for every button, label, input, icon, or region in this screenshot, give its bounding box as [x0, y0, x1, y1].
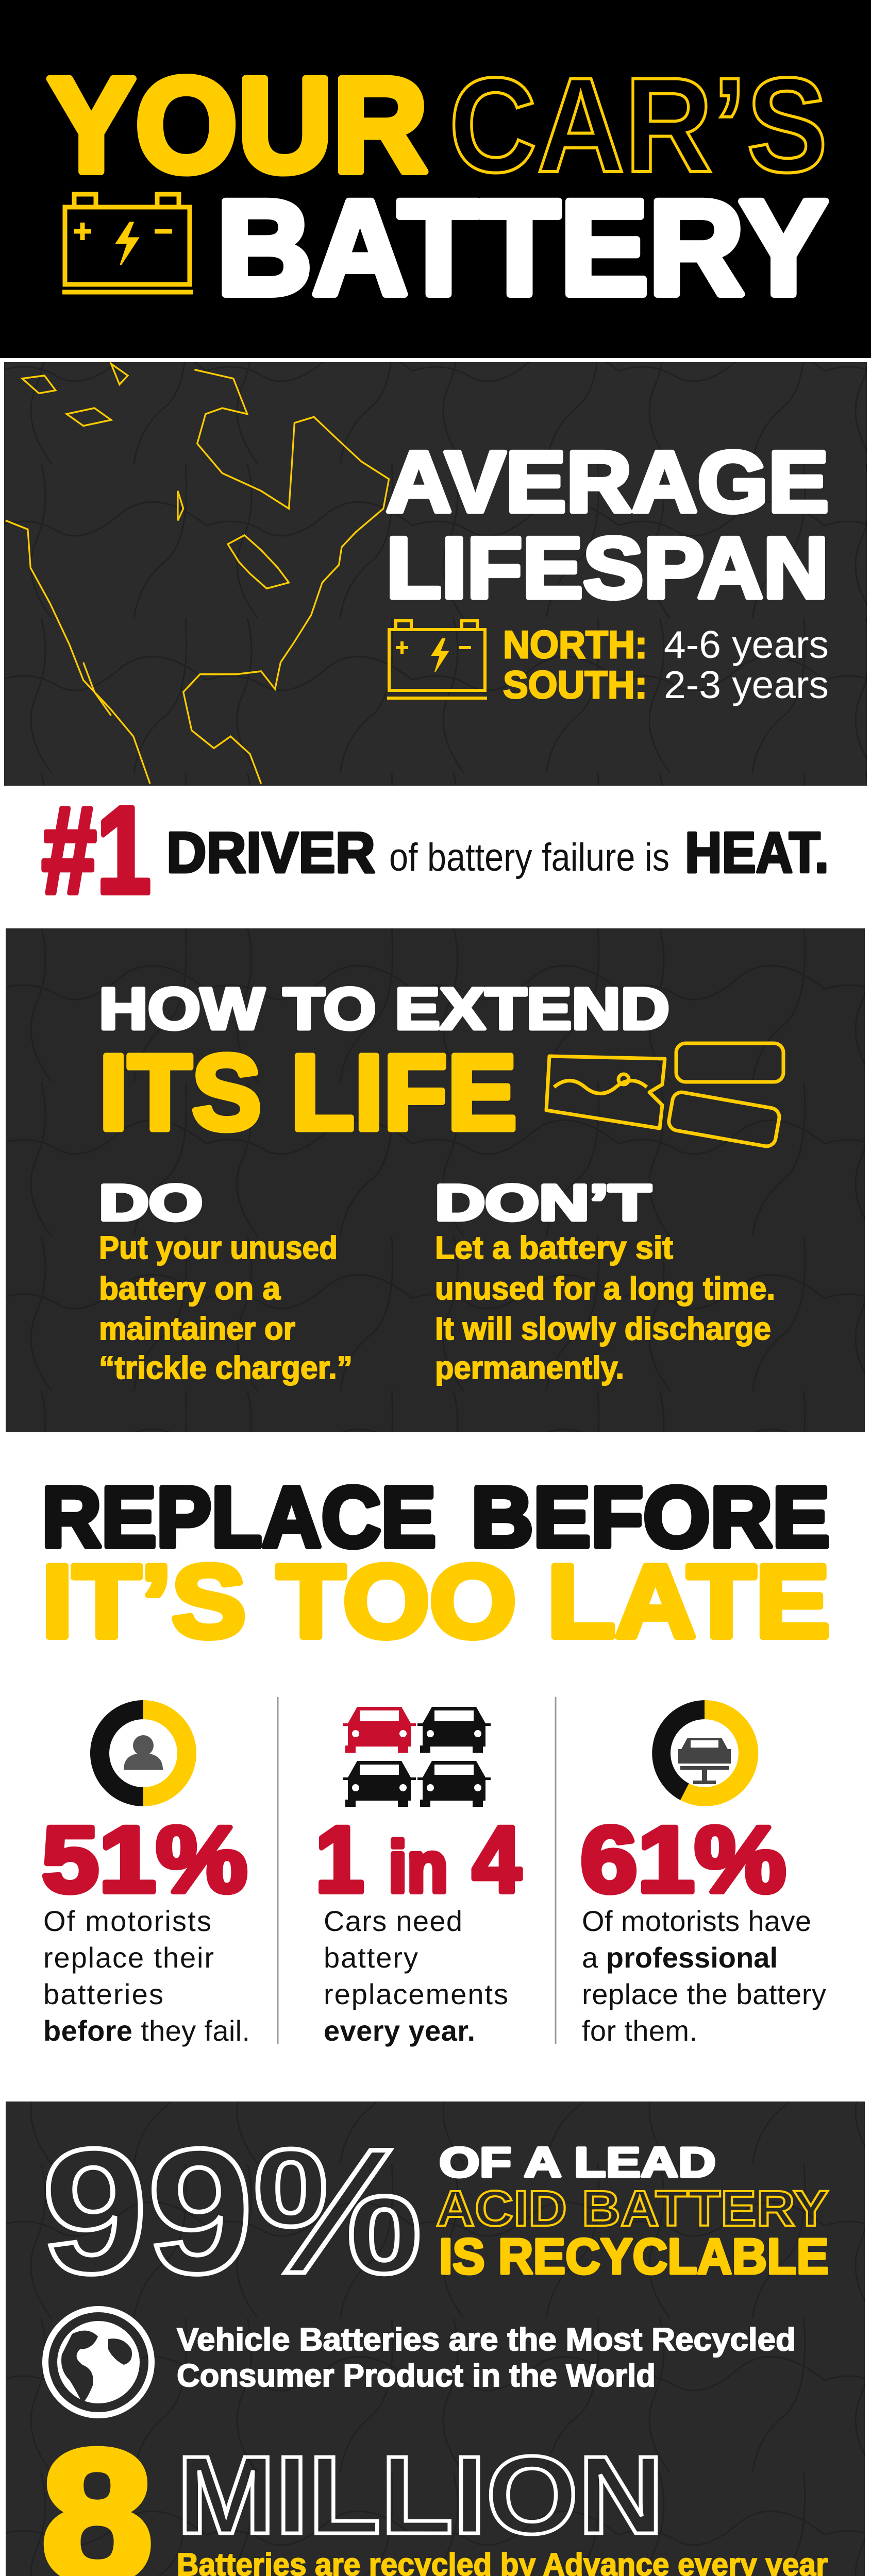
- icon: four cars: [343, 1707, 491, 1807]
- icon: globe: [45, 2309, 152, 2415]
- callout: #1 driver heat: of battery failure is: [389, 836, 669, 879]
- text: of a lead acid battery is recyclable: IS RECYCLABLE: [439, 2228, 829, 2284]
- callout: #1 driver heat: DRIVER: [166, 821, 375, 885]
- heading: average lifespan: [386, 433, 829, 616]
- callout: #1 driver heat: HEAT.: [685, 821, 829, 885]
- column: do: Put your unused: [99, 1230, 338, 1266]
- stat: 1 in 4: replacements: [324, 1978, 508, 2010]
- column: don't: [435, 1174, 775, 1386]
- panel: how to extend its life: [6, 928, 865, 1432]
- stat: 61%: [580, 1700, 826, 2047]
- title line 1: [47, 49, 828, 200]
- stat: 51%: [42, 1700, 250, 2047]
- stat: 61%: replace the battery: [582, 1978, 826, 2010]
- stat: 51%: batteries: [43, 1978, 163, 2010]
- text: most recycled product: Vehicle Batteries are the Most Recycled: [177, 2322, 796, 2358]
- heading: HOW TO EXTEND: [99, 976, 669, 1042]
- stat: 61%: for them.: [582, 2014, 697, 2047]
- text: north / south: [503, 623, 829, 706]
- column: don't: unused for a long time.: [435, 1271, 775, 1307]
- icon: battery: [62, 194, 193, 292]
- icon: battery small: [387, 621, 487, 698]
- title line 1: YOUR: [47, 49, 428, 200]
- big number: 8 million: MILLION: [177, 2433, 664, 2557]
- text: most recycled product: Consumer Product in the World: [177, 2358, 656, 2394]
- stat: 1 in 4: battery: [324, 1941, 418, 1974]
- stat: 1 in 4: [315, 1707, 521, 2047]
- column: do: [99, 1174, 353, 1386]
- column: don't: Let a battery sit: [435, 1230, 673, 1266]
- stat: 51%: replace their: [43, 1941, 214, 1974]
- column: don't: permanently.: [435, 1350, 624, 1386]
- big number: 8 million: [42, 2412, 828, 2576]
- column: do: maintainer or: [99, 1311, 295, 1347]
- stat: 61%: a professional: [582, 1941, 778, 1974]
- header: your car's battery: [0, 0, 871, 358]
- text: north / south: 2-3 years: [664, 663, 829, 706]
- text: north / south: NORTH:: [503, 623, 647, 666]
- icon: donut person: [90, 1700, 196, 1806]
- heading: replace before it's too late: BEFORE: [471, 1469, 830, 1565]
- column: do: DO: [99, 1174, 203, 1231]
- stat: 61%: Of motorists have: [582, 1905, 811, 1937]
- title line 2: BATTERY: [216, 172, 828, 323]
- heading: ITS LIFE: [99, 1033, 517, 1153]
- big number: 99%: 99%: [42, 2112, 422, 2311]
- stat: 51%: before they fail.: [43, 2014, 250, 2047]
- text: north / south: 4-6 years: [664, 623, 829, 666]
- stat: 1 in 4: every year.: [324, 2014, 475, 2047]
- column: don't: DON’T: [435, 1174, 651, 1231]
- text: most recycled product: [177, 2322, 796, 2394]
- text: of a lead acid battery is recyclable: [436, 2139, 829, 2284]
- text: of a lead acid battery is recyclable: ACID BATTERY: [436, 2180, 829, 2236]
- panel: recycling: [6, 2102, 865, 2576]
- callout: #1 driver heat: #1: [42, 781, 151, 919]
- heading: [99, 976, 669, 1153]
- text: of a lead acid battery is recyclable: OF A LEAD: [439, 2139, 716, 2186]
- callout: #1 driver heat: [42, 781, 829, 919]
- heading: replace before it's too late: [42, 1469, 830, 1659]
- heading: replace before it's too late: IT’S TOO LATE: [42, 1544, 830, 1659]
- panel: average lifespan: [4, 362, 867, 786]
- column: do: “trickle charger.”: [99, 1350, 353, 1386]
- stat: 51%: Of motorists: [43, 1905, 211, 1937]
- stat: 61%: 61%: [580, 1807, 786, 1912]
- heading: average lifespan: AVERAGE: [386, 433, 829, 530]
- stats dividers: [278, 1697, 556, 2044]
- stat: 1 in 4: Cars need: [324, 1905, 462, 1937]
- text: north / south: SOUTH:: [503, 663, 647, 706]
- stat: 1 in 4: 1 in 4: [315, 1807, 521, 1912]
- heading: average lifespan: LIFESPAN: [386, 519, 829, 616]
- stat: 51%: 51%: [42, 1807, 247, 1912]
- map outline: [6, 364, 389, 784]
- column: do: battery on a: [99, 1271, 281, 1307]
- column: don't: It will slowly discharge: [435, 1311, 771, 1347]
- title line 1: CAR’S: [449, 49, 828, 200]
- icon: battery clamp: [546, 1043, 783, 1148]
- heading: replace before it's too late: REPLACE: [42, 1469, 436, 1565]
- icon: donut car lift: [652, 1700, 758, 1806]
